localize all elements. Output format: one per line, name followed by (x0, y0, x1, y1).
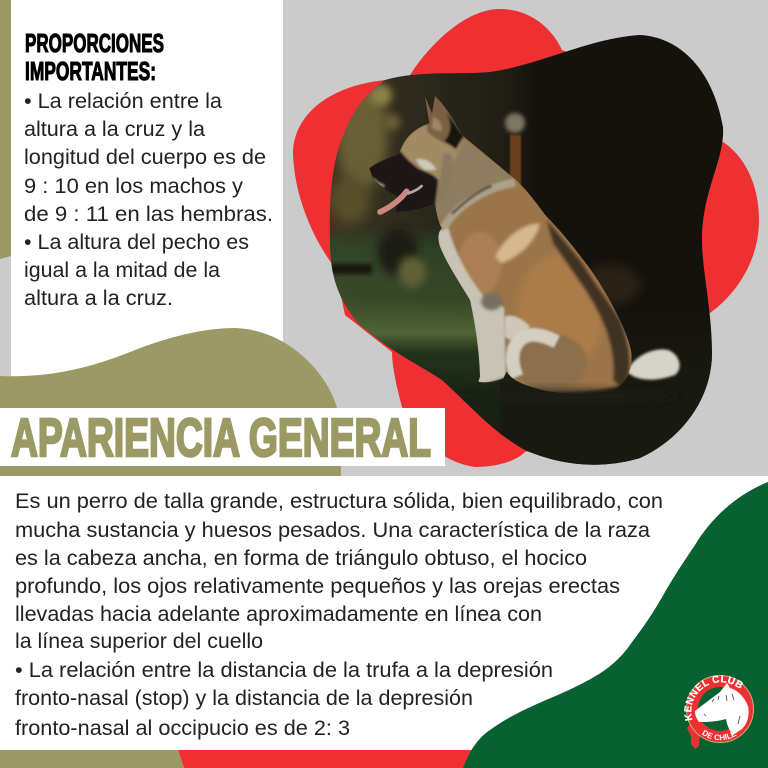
logo ribbon (687, 724, 700, 749)
haunch white (513, 335, 557, 377)
foreleg (470, 302, 507, 382)
panel text: proportions (24, 28, 273, 310)
olive wave behind title (0, 328, 341, 476)
teeth (408, 186, 422, 193)
proportions list: altura a la cruz. (24, 287, 173, 310)
green wave corner (463, 482, 768, 768)
body text: general appearance: es la cabeza ancha, en forma de triángulo obtuso, el hocico (15, 547, 587, 570)
body text: general appearance: Es un perro de talla grande, estructura sólida, bien equilibrado, con (15, 490, 663, 513)
white lower background (0, 476, 768, 768)
head (400, 125, 463, 182)
grass light spot (398, 256, 426, 288)
dog (367, 93, 680, 400)
body text: general appearance (15, 490, 663, 740)
bottom strip olive (0, 750, 184, 768)
soft bokeh glow (336, 80, 388, 190)
pale collar (443, 183, 515, 228)
warm haze (330, 176, 370, 224)
belly white (505, 316, 530, 340)
bokeh dot small (384, 114, 400, 130)
heading: proportions (25, 28, 164, 86)
lip (373, 179, 384, 186)
panel: white proportions panel (11, 0, 283, 380)
post globe (505, 113, 525, 133)
photo background (325, 30, 725, 470)
proportions list: 9 : 10 en los machos y (24, 175, 244, 198)
photo: Akita dog sitting in a forest (325, 30, 725, 470)
logo bottom text: DE CHILE (702, 730, 737, 740)
white title bar (0, 408, 445, 466)
tongue (380, 191, 407, 212)
lower shadow (549, 384, 620, 394)
elbow grey (481, 293, 502, 310)
bottom strip red (178, 750, 490, 768)
white chest (442, 230, 480, 303)
neck ruff (440, 152, 454, 180)
logo: Kennel Club de Chile (684, 675, 754, 749)
collar shadow (452, 186, 492, 214)
proportions list (24, 90, 273, 310)
logo centre (698, 687, 742, 731)
right ground (500, 320, 712, 465)
heading: proportions: PROPORCIONES (25, 28, 164, 58)
dark bank (330, 264, 372, 274)
red blob behind photo (293, 9, 759, 467)
shoulder highlight (495, 223, 540, 263)
logo ring (686, 676, 754, 742)
flank warm coat (516, 254, 602, 358)
olive side stripe (0, 0, 11, 259)
proportions list: • La altura del pecho es (24, 231, 249, 254)
body text: general appearance: fronto-nasal (stop) y la distancia de la depresión (15, 687, 473, 710)
ear inner (432, 117, 442, 132)
chest tan (458, 232, 502, 295)
bokeh dot (370, 84, 392, 106)
ear (425, 96, 459, 144)
heading: proportions: IMPORTANTES: (25, 56, 156, 86)
dark bush (378, 228, 418, 276)
proportions list: altura a la cruz y la (24, 118, 205, 141)
title: APARIENCIA GENERAL (11, 408, 431, 468)
base coat (370, 106, 632, 393)
back shading (547, 220, 629, 390)
tail (627, 349, 680, 380)
logo head details (704, 694, 740, 724)
body text: general appearance: la línea superior del cuello (15, 630, 263, 653)
neck (434, 140, 513, 221)
ground tones (330, 232, 540, 456)
body text: general appearance: llevadas hacia adelante aproximadamente en línea con (15, 603, 542, 626)
ear dark edge (444, 112, 464, 149)
logo dog head (695, 683, 749, 735)
background post (510, 135, 521, 185)
cheek light patch (416, 159, 436, 170)
distant glow (590, 264, 640, 306)
grass over paws (400, 389, 680, 403)
proportions list: igual a la mitad de la (24, 259, 220, 282)
background: grey upper area (0, 0, 768, 476)
proportions list: • La relación entre la (24, 90, 222, 113)
black muzzle (367, 151, 438, 217)
haunch tan (520, 334, 587, 388)
body text: general appearance: • La relación entre la distancia de la trufa a la depresión (15, 659, 553, 682)
body text: general appearance: profundo, los ojos relativamente pequeños y las orejas erectas (15, 575, 620, 598)
proportions list: longitud del cuerpo es de (24, 146, 266, 169)
body text: general appearance: fronto-nasal al occipucio es de 2: 3 (15, 717, 350, 740)
logo top text: KENNEL CLUB (684, 675, 743, 721)
body text: general appearance: mucha sustancia y huesos pesados. Una característica de la raza (15, 519, 650, 542)
dog body (367, 93, 640, 400)
proportions list: de 9 : 11 en las hembras. (24, 203, 273, 226)
